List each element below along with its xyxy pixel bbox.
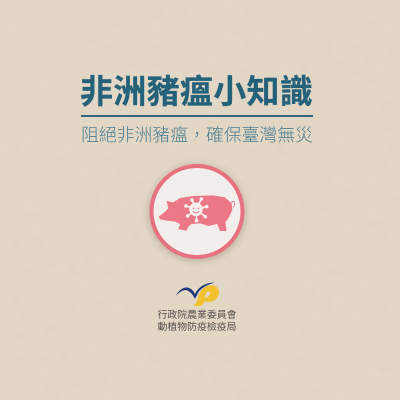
blue swoosh	[176, 282, 215, 299]
title divider	[80, 115, 313, 117]
yellow swoosh	[193, 285, 219, 306]
agency name	[157, 310, 236, 332]
subtitle: 阻絕非洲豬瘟，確保臺灣無災	[81, 125, 313, 145]
title: 非洲豬瘟小知識	[80, 72, 313, 110]
agency name: 動植物防疫檢疫局	[157, 322, 236, 332]
agency name: 行政院農業委員會	[157, 310, 236, 320]
icon: agency logo	[176, 282, 219, 306]
